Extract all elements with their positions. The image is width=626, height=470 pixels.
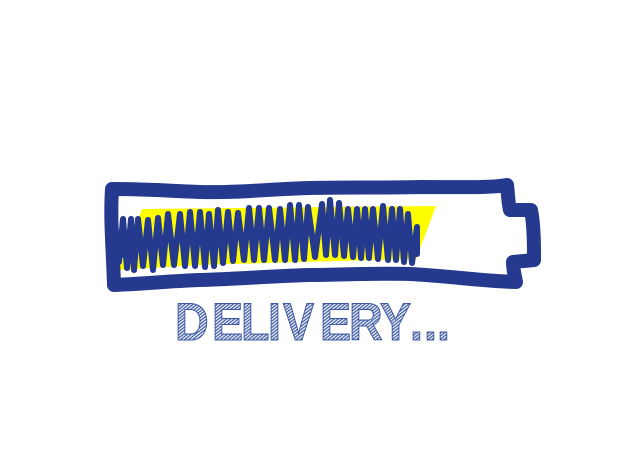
label: delivery: DELIVERY... [175,292,450,352]
battery outline [111,185,534,285]
scribbled charge level [119,200,417,270]
battery icon [111,185,534,285]
yellow charge highlight [118,206,436,270]
solid left edge of scribble [118,230,136,258]
